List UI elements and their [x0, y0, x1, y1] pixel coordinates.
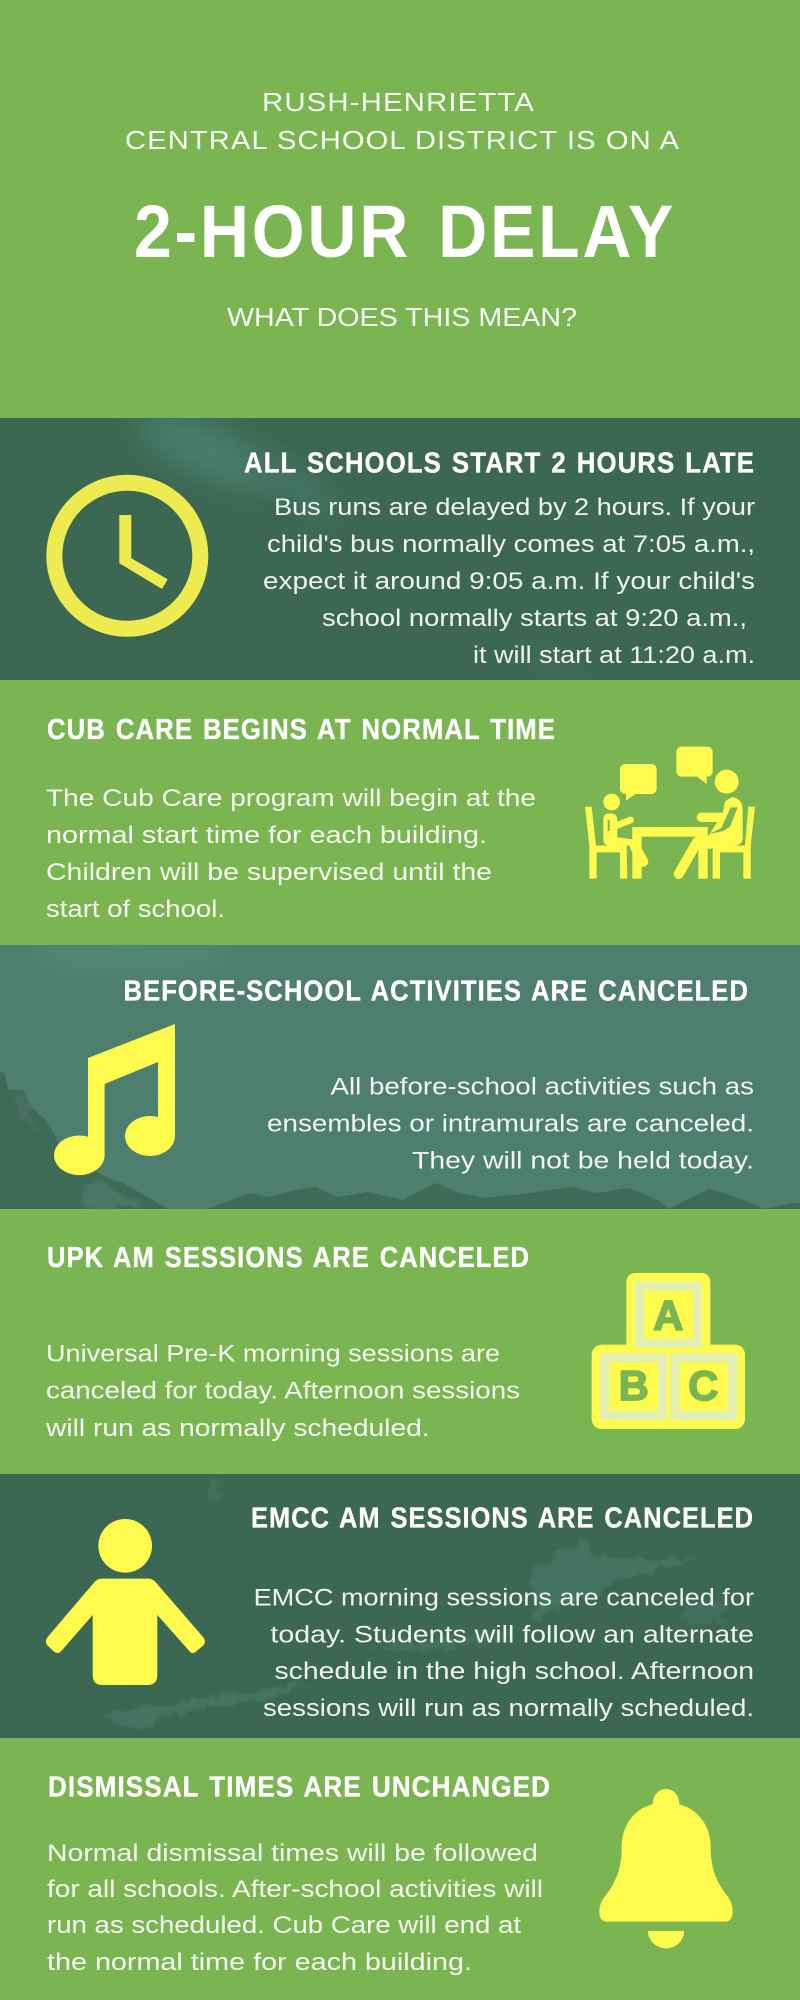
panel: all schools start 2 hours late: [0, 418, 800, 680]
body text: will run as normally scheduled.: [45, 1415, 430, 1442]
icon: adult and child talking at a table: [585, 747, 755, 879]
body text: [45, 1340, 520, 1442]
body text: [47, 1840, 543, 1976]
panel background: [0, 418, 800, 680]
icon: person: [46, 1519, 205, 1685]
title intro line 1: RUSH-HENRIETTA: [262, 87, 535, 117]
panel background with mountains: [0, 930, 800, 1209]
body text: All before-school activities such as: [330, 1074, 754, 1100]
body text: the normal time for each building.: [47, 1949, 472, 1976]
body text: [267, 1074, 754, 1174]
heading: DISMISSAL TIMES ARE UNCHANGED: [48, 1772, 551, 1804]
body text: Bus runs are delayed by 2 hours. If your: [274, 494, 755, 521]
icon: clock: [54, 483, 200, 629]
body text: Normal dismissal times will be followed: [47, 1840, 538, 1867]
main title: 2-HOUR DELAY: [134, 190, 676, 273]
body text: They will not be held today.: [412, 1148, 754, 1174]
icon: music notes: [54, 1024, 175, 1175]
subtitle: WHAT DOES THIS MEAN?: [227, 302, 577, 332]
panel: UPK sessions: [45, 1242, 745, 1442]
body text: run as scheduled. Cub Care will end at: [47, 1912, 521, 1939]
body text: start of school.: [46, 896, 225, 923]
icon: ABC blocks: A: [653, 1292, 683, 1339]
body text: [263, 494, 755, 669]
icon: ABC blocks: C: [688, 1362, 718, 1409]
header panel: [125, 87, 680, 332]
body text: canceled for today. Afternoon sessions: [46, 1378, 520, 1405]
heading: UPK AM SESSIONS ARE CANCELED: [47, 1242, 530, 1274]
panel: dismissal times: [47, 1772, 733, 1976]
body text: [254, 1585, 754, 1722]
heading: CUB CARE BEGINS AT NORMAL TIME: [47, 714, 556, 746]
body text: EMCC morning sessions are canceled for: [254, 1585, 754, 1612]
body text: expect it around 9:05 a.m. If your child's: [263, 568, 755, 595]
body text: school normally starts at 9:20 a.m.,: [322, 605, 747, 632]
panel: EMCC sessions: [0, 1474, 800, 1738]
body text: normal start time for each building.: [46, 822, 487, 849]
icon: ABC blocks: B: [619, 1362, 649, 1409]
body text: [46, 785, 536, 923]
body text: schedule in the high school. Afternoon: [274, 1658, 754, 1685]
body text: Universal Pre-K morning sessions are: [46, 1340, 500, 1368]
body text: ensembles or intramurals are canceled.: [267, 1110, 754, 1138]
body text: today. Students will follow an alternate: [270, 1621, 754, 1648]
panel background with texture: [0, 1474, 800, 1738]
body text: sessions will run as normally scheduled.: [263, 1695, 754, 1722]
body text: for all schools. After-school activities will: [47, 1876, 543, 1903]
icon: bell: [599, 1789, 733, 1948]
body text: child's bus normally comes at 7:05 a.m.,: [267, 531, 755, 558]
panel: cub care: [46, 714, 755, 923]
body text: The Cub Care program will begin at the: [46, 785, 536, 812]
panel: before-school activities: [0, 930, 800, 1209]
icon: ABC blocks: [592, 1273, 745, 1429]
body text: it will start at 11:20 a.m.: [473, 642, 755, 669]
title intro line 2: CENTRAL SCHOOL DISTRICT IS ON A: [125, 125, 680, 155]
body text: Children will be supervised until the: [46, 859, 492, 886]
